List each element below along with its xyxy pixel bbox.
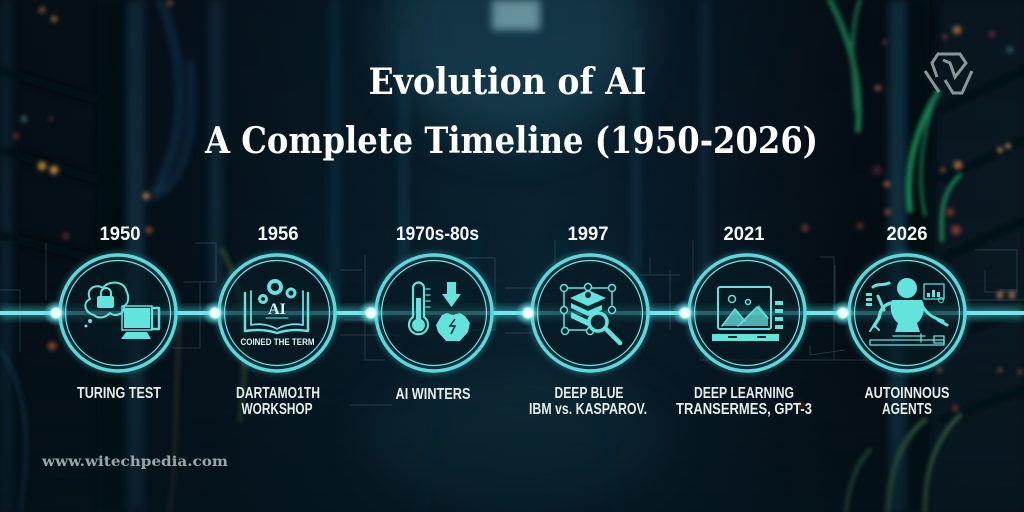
node — [672, 300, 698, 326]
caption: coined the term: COINED THE TERM — [240, 337, 314, 347]
label: AI Winters: AI WINTERS — [396, 386, 470, 403]
year 1970s-80s: 1970s-80s — [396, 224, 479, 245]
label: Dartmouth Workshop: DARTAMO1TH — [236, 385, 320, 402]
node — [358, 300, 384, 326]
title: A Complete Timeline (1950-2026) — [204, 120, 818, 162]
ring — [219, 255, 335, 371]
milestone 1997: Deep Blue — [515, 224, 648, 418]
label: Dartmouth Workshop: WORKSHOP — [242, 401, 312, 418]
node — [830, 300, 856, 326]
label: Turing Test: TURING TEST — [77, 385, 161, 402]
label: Deep Blue, IBM vs. Kasparov: IBM vs. KASPAROV. — [529, 401, 647, 418]
label: Autonomous Agents: AUTOINNOUS — [864, 385, 950, 402]
year 2021: 2021 — [724, 224, 765, 245]
milestone 1956: Dartmouth Workshop — [202, 224, 335, 418]
label: Deep Learning: TRANSERMES, GPT-3 — [676, 401, 812, 418]
icon: lock in cloud and computer — [84, 283, 159, 339]
label: Deep Learning — [676, 385, 812, 418]
ring — [689, 255, 805, 371]
label: Deep Learning: DEEP LEARNING — [694, 385, 794, 402]
website footer: www.witechpedia.com — [41, 454, 228, 470]
node — [202, 300, 228, 326]
icon: open book with AI and gears: AI — [268, 301, 286, 318]
title: Evolution of AI — [368, 61, 646, 103]
year 1950: 1950 — [100, 224, 140, 245]
circuit traces behind the timeline — [0, 240, 1024, 405]
logo mark — [925, 54, 972, 93]
node — [515, 300, 541, 326]
label: Dartmouth Workshop — [236, 385, 320, 418]
icon: open book with AI and gears — [245, 281, 308, 333]
ring — [376, 255, 492, 371]
icon: robot with tools — [866, 278, 947, 345]
title — [204, 61, 818, 162]
year 1997: 1997 — [568, 224, 608, 245]
label: Autonomous Agents: AGENTS — [882, 401, 932, 418]
node — [43, 300, 69, 326]
timeline line — [0, 308, 1024, 318]
label: Deep Blue, IBM vs. Kasparov — [529, 385, 647, 418]
year 2026: 2026 — [886, 224, 928, 245]
ring — [60, 255, 176, 371]
year 1956: 1956 — [258, 224, 298, 245]
milestone 1950: Turing Test — [43, 224, 176, 402]
icon: data layers under magnifying glass — [560, 284, 620, 343]
label: Autonomous Agents — [864, 385, 950, 418]
icon: laptop with landscape — [712, 287, 783, 341]
ring — [849, 255, 965, 371]
label: Deep Blue, IBM vs. Kasparov: DEEP BLUE — [554, 385, 624, 402]
milestone 2026: Autonomous Agents — [830, 224, 965, 418]
ring — [532, 255, 648, 371]
milestone 2021: Deep Learning — [672, 224, 812, 418]
milestone 1970s-80s: AI Winters — [358, 224, 492, 403]
icon: thermometer, arrow and broken piggy bank — [409, 282, 470, 341]
